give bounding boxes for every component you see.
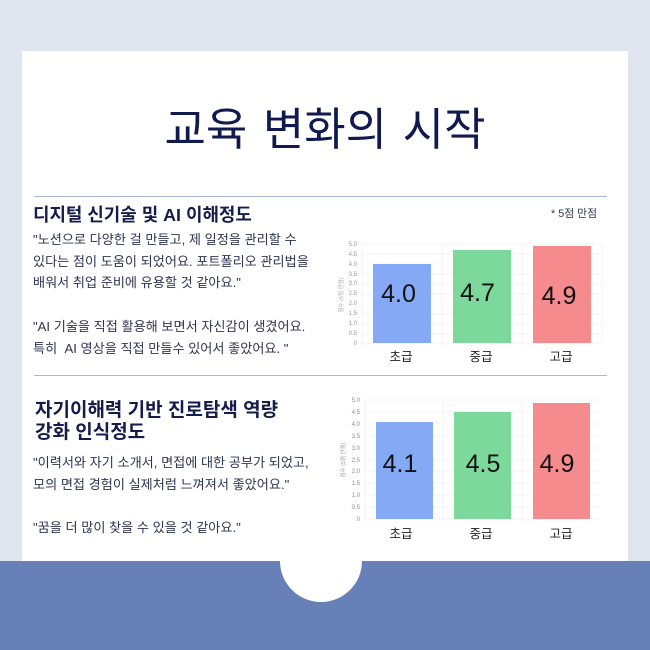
bar chart: digital AI understanding: 4.0: [349, 262, 358, 268]
bar chart: career exploration: 4.0: [352, 422, 361, 428]
text block: career quotes: [33, 455, 309, 534]
bar chart: digital AI understanding: 5.0: [349, 242, 358, 248]
text block: digital AI quotes: "노션으로 다양한 걸 만들고, 제 일정을 관리할 수: [33, 232, 297, 247]
divider middle: [34, 375, 607, 376]
heading: self-understanding career: 강화 인식정도: [35, 422, 145, 443]
text block: career quotes: "꿈을 더 많이 찾을 수 있을 것 같아요.": [33, 520, 241, 534]
panel: white card: [22, 51, 628, 561]
text block: career quotes: "이력서와 자기 소개서, 면접에 대한 공부가 되었고,: [33, 455, 309, 470]
bar chart: digital AI understanding: 고급: [549, 350, 573, 364]
bar chart: digital AI understanding: 4.9: [542, 282, 576, 310]
bar chart: digital AI understanding: 2.0: [349, 301, 358, 307]
text block: digital AI quotes: 배워서 취업 준비에 유용할 것 같아요.": [33, 275, 241, 290]
bar chart: digital AI understanding: 4.7: [460, 279, 495, 307]
text block: digital AI quotes: 특히 AI 영상을 직접 만들수 있어서 좋았어요. ": [33, 341, 288, 356]
bar chart: career exploration: 고급: [549, 527, 573, 541]
bar chart: digital AI understanding: 3.5: [349, 272, 358, 278]
bar chart: career exploration: 1.5: [352, 481, 361, 487]
text block: digital AI quotes: [33, 232, 309, 356]
bar chart: career exploration: 4.5: [352, 410, 361, 416]
bar chart: career exploration: 4.1: [383, 450, 417, 478]
text block: digital AI quotes: "AI 기술을 직접 활용해 보면서 자신감이 생겼어요.: [33, 319, 305, 334]
footer band: [0, 561, 650, 650]
bar chart: career exploration: 3.5: [352, 434, 361, 440]
bar chart: career exploration: 5.0: [352, 398, 361, 404]
bar chart: career exploration: 0: [357, 517, 361, 523]
bar chart: digital AI understanding: 중급: [469, 350, 493, 364]
heading: self-understanding career: 자기이해력 기반 진로탐색 역량: [35, 400, 278, 421]
bar chart: digital AI understanding: 1.5: [349, 311, 358, 317]
bar chart: digital AI understanding: 2.5: [349, 291, 358, 297]
bar chart: digital AI understanding: 점수 (5점 만점): [337, 277, 345, 313]
bar chart: digital AI understanding: 4.0: [381, 280, 416, 308]
divider top: [34, 196, 607, 197]
bar chart: digital AI understanding: 0: [354, 341, 358, 347]
text block: career quotes: 모의 면접 경험이 실제처럼 느껴져서 좋았어요.": [33, 476, 289, 492]
bar chart: career exploration: 2.5: [352, 458, 361, 464]
white semicircle notch: [280, 561, 362, 602]
bar chart: career exploration: 2.0: [352, 469, 361, 475]
bar chart: digital AI understanding: 1.0: [349, 321, 358, 327]
text block: digital AI quotes: 있다는 점이 도움이 되었어요. 포트폴리오 관리법을: [33, 254, 309, 269]
bar chart: digital AI understanding: 0.5: [349, 331, 358, 337]
title: 교육 변화의 시작: [164, 93, 486, 158]
bar chart: career exploration: 4.9: [540, 450, 574, 478]
heading: self-understanding career: [35, 400, 278, 443]
bar chart: career exploration: 1.0: [352, 493, 361, 499]
heading: digital AI understanding: 디지털 신기술 및 AI 이해정도: [33, 205, 252, 225]
bar chart: career exploration: 3.0: [352, 446, 361, 452]
bar chart: career exploration: 초급: [389, 527, 413, 541]
bar chart: digital AI understanding: 4.5: [349, 252, 358, 258]
bar chart: career exploration: 4.5: [466, 450, 500, 478]
bar chart: digital AI understanding: 3.0: [349, 281, 358, 287]
bar chart: career exploration: 중급: [469, 527, 493, 541]
bar chart: career exploration: 0.5: [352, 505, 361, 511]
bar chart: digital AI understanding: 초급: [389, 350, 413, 364]
bar chart: career exploration: 점수 (5점 만점): [339, 442, 347, 478]
note: 5-point scale: * 5점 만점: [551, 208, 597, 220]
